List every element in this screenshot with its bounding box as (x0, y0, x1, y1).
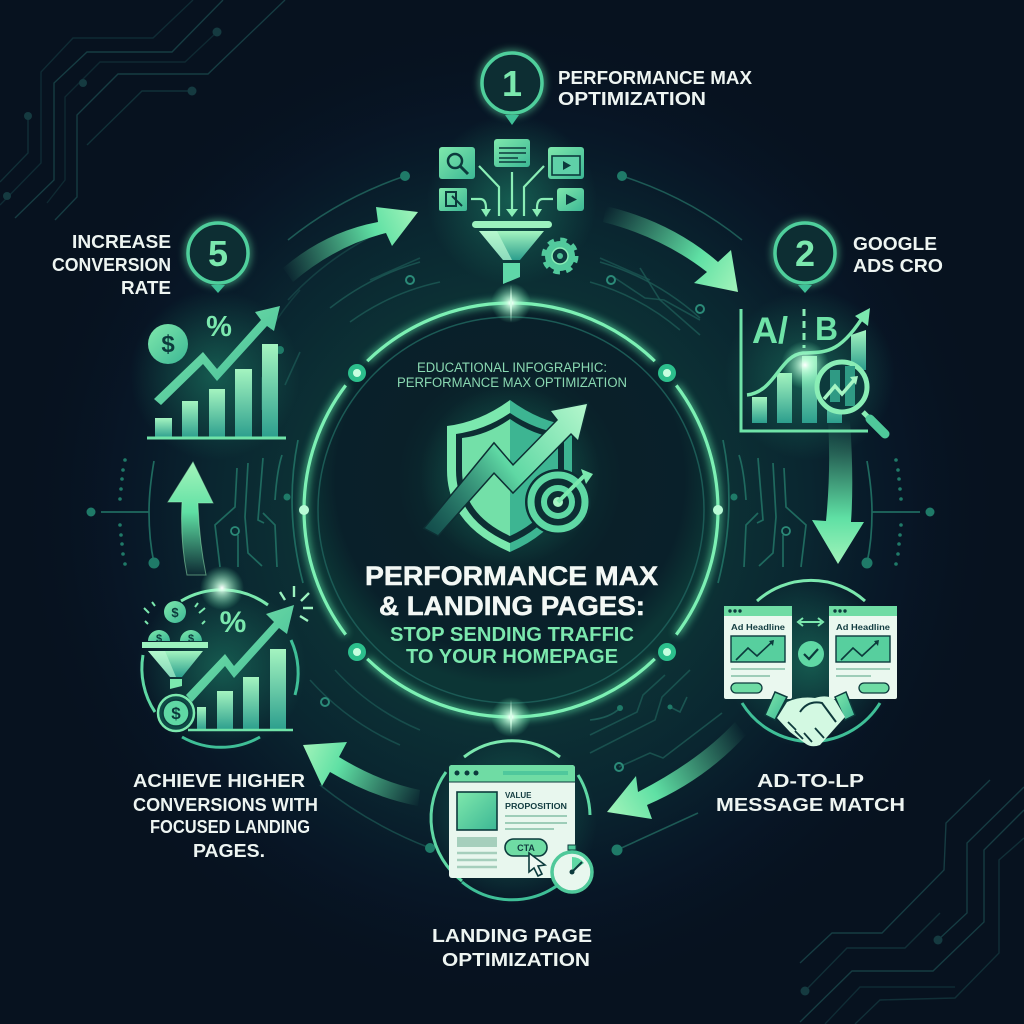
label: achieve higher conversions (133, 771, 318, 861)
icon: funnel coins and growth chart: $ (188, 633, 194, 645)
label: landing page optimization: LANDING PAGE (432, 926, 592, 946)
icon: landing page window with cta and timer: VALUE (505, 791, 532, 800)
icon: ring and matching windows: Ad Headline (836, 622, 890, 632)
label: google ads cro (853, 234, 943, 276)
subheading: stop sending traffic: STOP SENDING TRAFFIC (390, 624, 634, 646)
text: educational subtitle: PERFORMANCE MAX OPTIMIZATION (397, 375, 627, 390)
text: educational subtitle: EDUCATIONAL INFOGRAPHIC: (417, 360, 607, 375)
icon: funnel coins and growth chart: $ (171, 605, 179, 620)
arrow: step 3 to step 4 (607, 722, 746, 819)
icon: gear (545, 241, 575, 271)
chart: a/b test with magnifier: B (815, 310, 838, 347)
label: increase conversion rate (52, 232, 171, 298)
arrow: step 4 to final step (303, 742, 420, 806)
label: landing page optimization: OPTIMIZATION (442, 950, 590, 970)
heading: performance max and landing pages: PERFORMANCE MAX (365, 561, 658, 591)
label: increase conversion rate: RATE (121, 278, 171, 298)
icon: handshake (765, 692, 855, 746)
right circuit ornament (681, 440, 934, 600)
label: increase conversion rate: INCREASE (72, 232, 171, 252)
label: performance max optimization: PERFORMANCE MAX (558, 68, 752, 88)
chart: a/b test with magnifier: A/ (752, 310, 788, 351)
panel: step 5 increase conversion rate (52, 223, 300, 460)
badge: number 1: 1 (502, 63, 522, 104)
label: increase conversion rate: CONVERSION (52, 255, 171, 275)
subheading: stop sending traffic (390, 624, 634, 668)
icon: ring and matching windows (724, 580, 897, 742)
icon: funnel coins and growth chart: $ (156, 633, 162, 645)
panel: final step higher conversions (133, 566, 318, 861)
chart: rising bars with arrow: % (206, 311, 232, 343)
icon: landing page window with cta and timer: PROPOSITION (505, 802, 567, 811)
icon: channel tiles feeding funnel (439, 139, 584, 284)
panel: step 2 google ads cro (725, 223, 943, 460)
label: achieve higher conversions: PAGES. (193, 841, 265, 861)
chart: a/b test with magnifier (741, 308, 885, 434)
icon: landing page window with cta and timer (431, 741, 592, 900)
arrow: step 1 to step 2 (603, 206, 738, 292)
arrow: step 5 to step 1 (283, 207, 418, 282)
label: performance max optimization: OPTIMIZATION (558, 89, 706, 109)
text: educational subtitle (397, 360, 627, 390)
arrow: final step to step 5 (168, 462, 213, 575)
heading: performance max and landing pages: & LANDING PAGES: (379, 591, 645, 621)
icon: ring and matching windows: Ad Headline (731, 622, 785, 632)
badge: number 1 (482, 53, 542, 125)
badge: number 2 (775, 223, 835, 293)
icon: funnel coins and growth chart: $ (171, 704, 181, 723)
label: achieve higher conversions: FOCUSED LANDING (150, 817, 310, 837)
icon: funnel coins and growth chart (142, 566, 313, 747)
chart: rising bars with arrow (147, 306, 286, 438)
label: achieve higher conversions: CONVERSIONS WITH (133, 795, 318, 815)
heading: performance max and landing pages (365, 561, 658, 621)
label: ad-to-lp message match (716, 771, 905, 815)
icon: shield with arrow and target (420, 385, 600, 565)
subheading: stop sending traffic: TO YOUR HOMEPAGE (406, 646, 618, 668)
label: ad-to-lp message match: AD-TO-LP (757, 771, 864, 791)
arrow: step 2 to step 3 (812, 420, 864, 564)
chart: rising bars with arrow: $ (161, 331, 175, 358)
label: landing page optimization (432, 926, 592, 970)
panel: step 1 performance max optimization (427, 53, 752, 285)
panel: step 4 landing page optimization (427, 735, 597, 970)
label: achieve higher conversions: ACHIEVE HIGHER (133, 771, 305, 791)
badge: number 5: 5 (208, 233, 228, 274)
icon: funnel coins and growth chart: % (220, 606, 246, 639)
icon: landing page window with cta and timer: CTA (517, 843, 535, 853)
label: google ads cro: GOOGLE (853, 234, 937, 254)
badge: number 2: 2 (795, 233, 815, 274)
left circuit ornament (86, 440, 340, 600)
label: performance max optimization (558, 68, 752, 109)
label: ad-to-lp message match: MESSAGE MATCH (716, 795, 905, 815)
panel: step 3 ad-to-lp message match (716, 578, 905, 815)
panel: central title (365, 360, 658, 668)
ambient circuit arcs and nodes around the ring (262, 176, 742, 850)
label: google ads cro: ADS CRO (853, 256, 943, 276)
badge: number 5 (188, 223, 248, 293)
central ring (299, 283, 723, 737)
